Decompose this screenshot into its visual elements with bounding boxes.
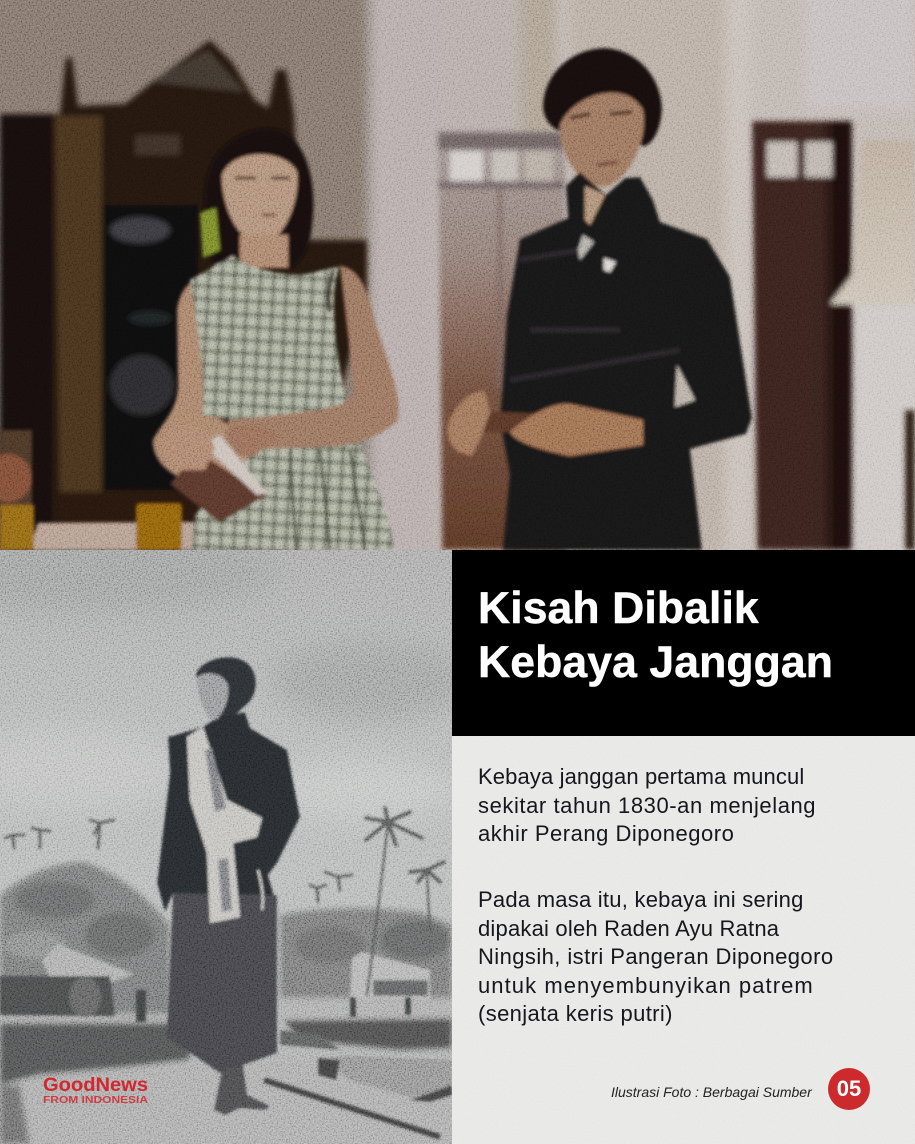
- logo: GoodNews From Indonesia: GoodNews: [43, 1074, 148, 1096]
- page number badge: [828, 1068, 870, 1110]
- huts, mat and rolled pole: [0, 944, 452, 1137]
- paragraph 2: Pada masa itu, kebaya ini sering: [478, 887, 804, 912]
- woman in dark kebaya: [157, 657, 300, 1115]
- panel: title on black: [452, 550, 915, 736]
- paragraph 2: [478, 887, 833, 1026]
- girl in checked dress: [153, 128, 399, 550]
- photo: engraving of woman in kebaya with landscape: [0, 550, 452, 1144]
- panel: body text: [452, 736, 915, 1144]
- heading: Kebaya Janggan: [478, 638, 833, 687]
- landscape hills and ground: [0, 862, 452, 1144]
- paragraph 2: Ningsih, istri Pangeran Diponegoro: [478, 944, 833, 969]
- logo: GoodNews From Indonesia: [43, 1074, 148, 1106]
- paragraph 2: dipakai oleh Raden Ayu Ratna: [478, 916, 779, 941]
- logo: GoodNews From Indonesia: FROM INDONESIA: [43, 1095, 148, 1106]
- page number badge: 05: [837, 1076, 861, 1101]
- woman in black kebaya: [447, 48, 752, 550]
- paragraph 2: untuk menyembunyikan patrem: [478, 973, 814, 998]
- paragraph 1: Kebaya janggan pertama muncul: [478, 764, 804, 789]
- table and glasses: [0, 430, 380, 550]
- paragraph 1: akhir Perang Diponegoro: [478, 821, 734, 846]
- heading: Kisah Dibalik: [478, 584, 759, 633]
- heading: [478, 584, 833, 687]
- cabinet: [0, 40, 367, 550]
- paper grain: [0, 550, 452, 1144]
- paragraph 1: sekitar tahun 1830-an menjelang: [478, 793, 816, 818]
- paragraph 1: [478, 764, 816, 846]
- photo credit: Ilustrasi Foto : Berbagai Sumber: [611, 1084, 812, 1100]
- wall background: [0, 0, 915, 570]
- photo: film still of two women in a colonial interior: [0, 0, 915, 550]
- palm trees: [5, 808, 444, 995]
- film grain: [0, 0, 915, 550]
- doors and lamp: [438, 121, 915, 550]
- paragraph 2: (senjata keris putri): [478, 1001, 673, 1026]
